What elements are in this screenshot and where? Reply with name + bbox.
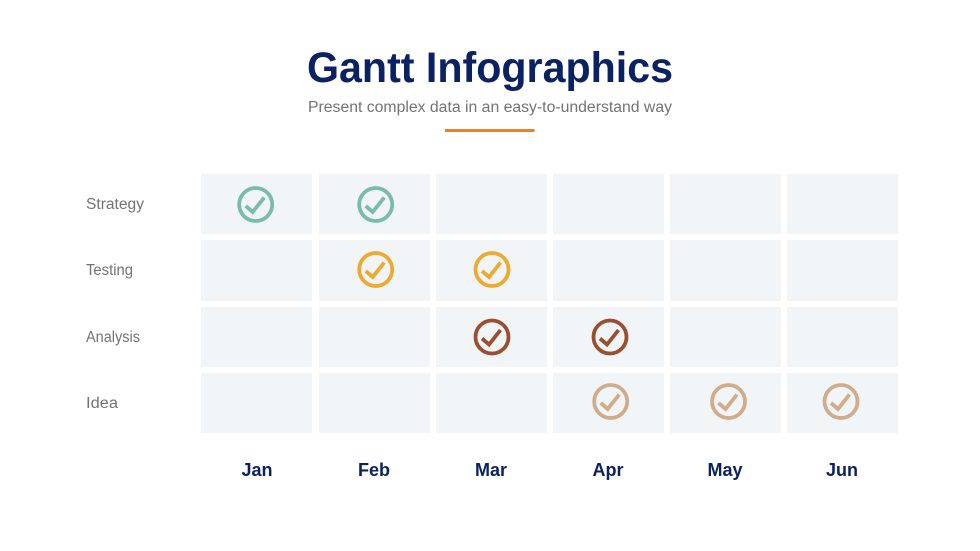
month labels: Feb bbox=[358, 460, 390, 480]
checks: Strategy bbox=[239, 188, 392, 221]
row labels: Analysis bbox=[86, 329, 140, 346]
gantt grid cells bbox=[201, 174, 898, 433]
month labels: May bbox=[707, 460, 743, 480]
month labels bbox=[241, 460, 858, 480]
checks: Analysis bbox=[476, 320, 626, 354]
row labels bbox=[86, 196, 144, 412]
subtitle: Present complex data in an easy-to-understand way bbox=[308, 99, 672, 116]
row labels: Testing bbox=[86, 262, 133, 279]
checks: Idea bbox=[594, 385, 858, 418]
checks: Testing bbox=[359, 253, 508, 286]
title underline bbox=[445, 129, 534, 132]
row labels: Idea bbox=[86, 395, 118, 412]
month labels: Apr bbox=[592, 460, 624, 480]
month labels: Jun bbox=[826, 460, 858, 480]
title: Gantt Infographics bbox=[307, 44, 673, 92]
month labels: Jan bbox=[241, 460, 273, 480]
month labels: Mar bbox=[475, 460, 507, 480]
row labels: Strategy bbox=[86, 196, 144, 213]
